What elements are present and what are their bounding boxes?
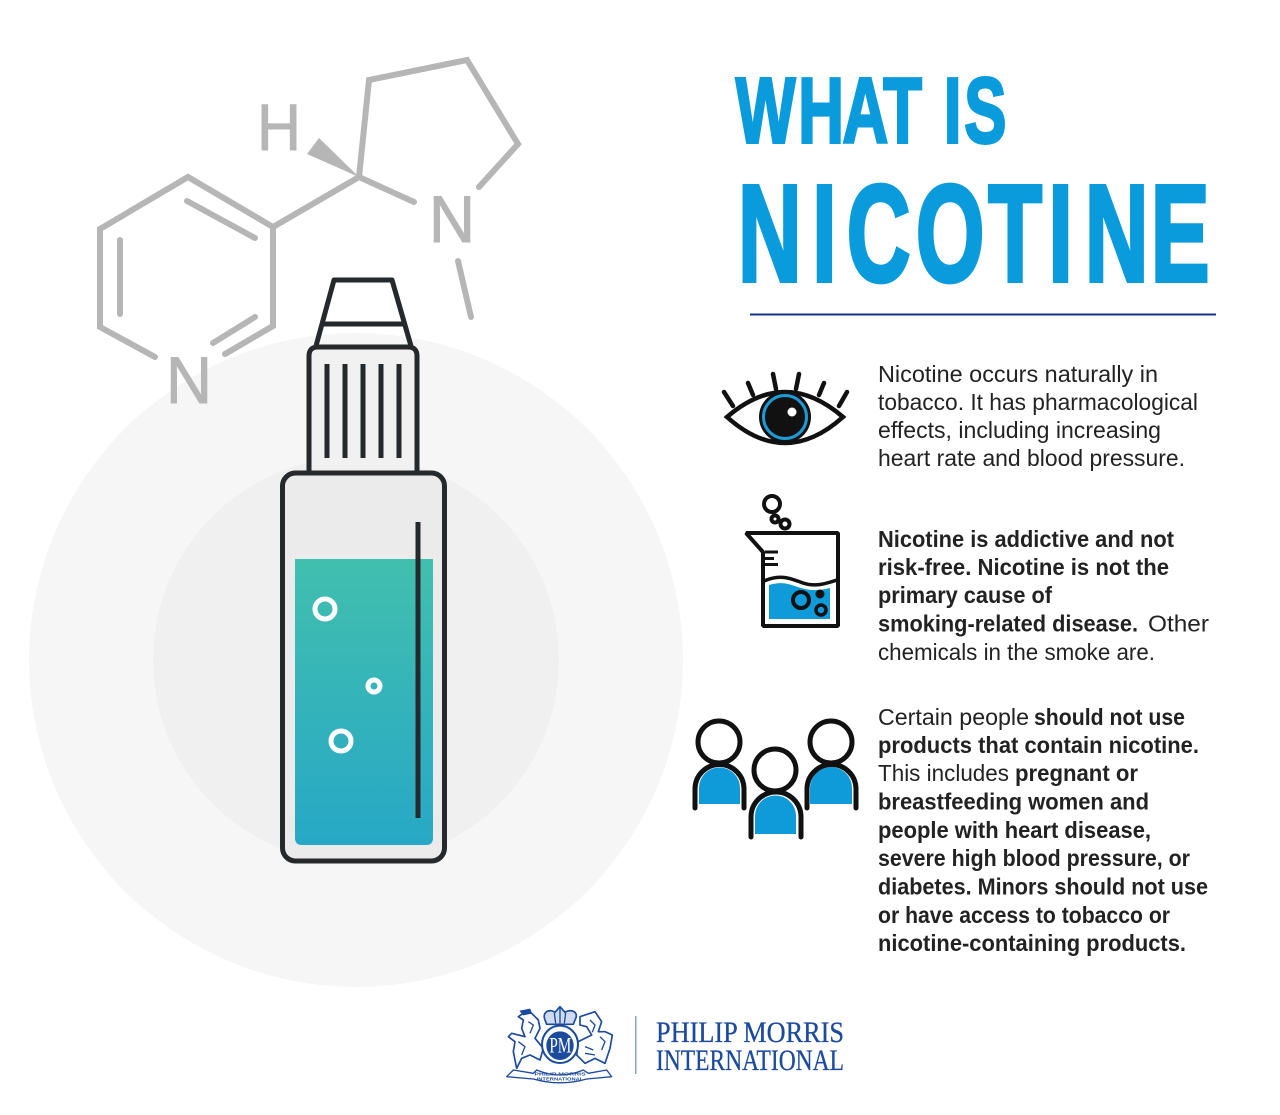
text: who should not use: pregnant or bbox=[1015, 760, 1138, 786]
person left bbox=[695, 721, 744, 808]
text: who should not use: Certain people bbox=[878, 704, 1029, 730]
text: addictive: chemicals in the smoke are. bbox=[878, 639, 1155, 665]
logo crest: PM bbox=[549, 1032, 571, 1057]
nicotine molecule diagram bbox=[100, 60, 518, 417]
logo divider bbox=[635, 1016, 636, 1074]
text: natural occurrence: heart rate and blood pressure. bbox=[878, 445, 1185, 471]
logo: Philip Morris International bbox=[507, 1007, 844, 1083]
text: natural occurrence: tobacco. It has pharmacological bbox=[878, 389, 1198, 415]
icon: beaker bbox=[746, 496, 838, 626]
text: addictive: smoking-related disease. bbox=[878, 610, 1138, 636]
logo crest bbox=[507, 1007, 612, 1083]
text: who should not use: This includes bbox=[878, 760, 1009, 786]
icon: people bbox=[695, 721, 856, 837]
icon: eye bbox=[724, 374, 847, 443]
text: addictive: Other bbox=[1148, 610, 1209, 636]
text: who should not use: nicotine-containing products. bbox=[878, 930, 1186, 956]
text: who should not use: products that contain nicotine. bbox=[878, 732, 1199, 758]
title: NICOTINE bbox=[738, 156, 1210, 311]
logo wordmark bbox=[656, 1016, 844, 1077]
text: who should not use: should not use bbox=[1034, 704, 1185, 730]
title: WHAT IS bbox=[736, 58, 1006, 162]
person centre bbox=[751, 749, 801, 837]
text: natural occurrence: Nicotine occurs naturally in bbox=[878, 361, 1158, 387]
nicotine molecule diagram: H bbox=[257, 90, 301, 164]
bubbles bbox=[315, 599, 380, 751]
logo crest: PHILIP MORRIS bbox=[534, 1072, 586, 1077]
level bar bbox=[416, 522, 420, 818]
e-liquid bottle bbox=[282, 280, 444, 861]
background circles bbox=[29, 333, 683, 987]
text: who should not use: people with heart disease, bbox=[878, 817, 1151, 843]
text: addictive: risk-free. Nicotine is not the bbox=[878, 554, 1169, 580]
liquid bbox=[295, 559, 433, 845]
text: natural occurrence bbox=[878, 361, 1198, 471]
bottle tip bbox=[316, 280, 411, 346]
text: addictive: Nicotine is addictive and not bbox=[878, 526, 1174, 552]
logo wordmark: PHILIP MORRIS bbox=[656, 1016, 844, 1049]
text: natural occurrence: effects, including increasing bbox=[878, 417, 1161, 443]
text: who should not use: or have access to tobacco or bbox=[878, 902, 1170, 928]
text: who should not use: severe high blood pressure, or bbox=[878, 845, 1190, 871]
text: who should not use bbox=[878, 704, 1208, 956]
nicotine molecule diagram: N bbox=[166, 343, 212, 417]
bottle body bbox=[282, 473, 444, 861]
text: addictive bbox=[878, 526, 1209, 665]
person right bbox=[807, 721, 856, 808]
title bbox=[736, 58, 1210, 311]
text: who should not use: diabetes. Minors should not use bbox=[878, 874, 1208, 900]
logo wordmark: INTERNATIONAL bbox=[656, 1044, 844, 1077]
text: who should not use: breastfeeding women and bbox=[878, 788, 1149, 814]
text: addictive: primary cause of bbox=[878, 582, 1052, 608]
title rule bbox=[750, 314, 1216, 316]
nicotine molecule diagram: N bbox=[429, 182, 475, 256]
bottle ribbed collar bbox=[309, 347, 417, 472]
logo crest: INTERNATIONAL bbox=[537, 1077, 584, 1082]
